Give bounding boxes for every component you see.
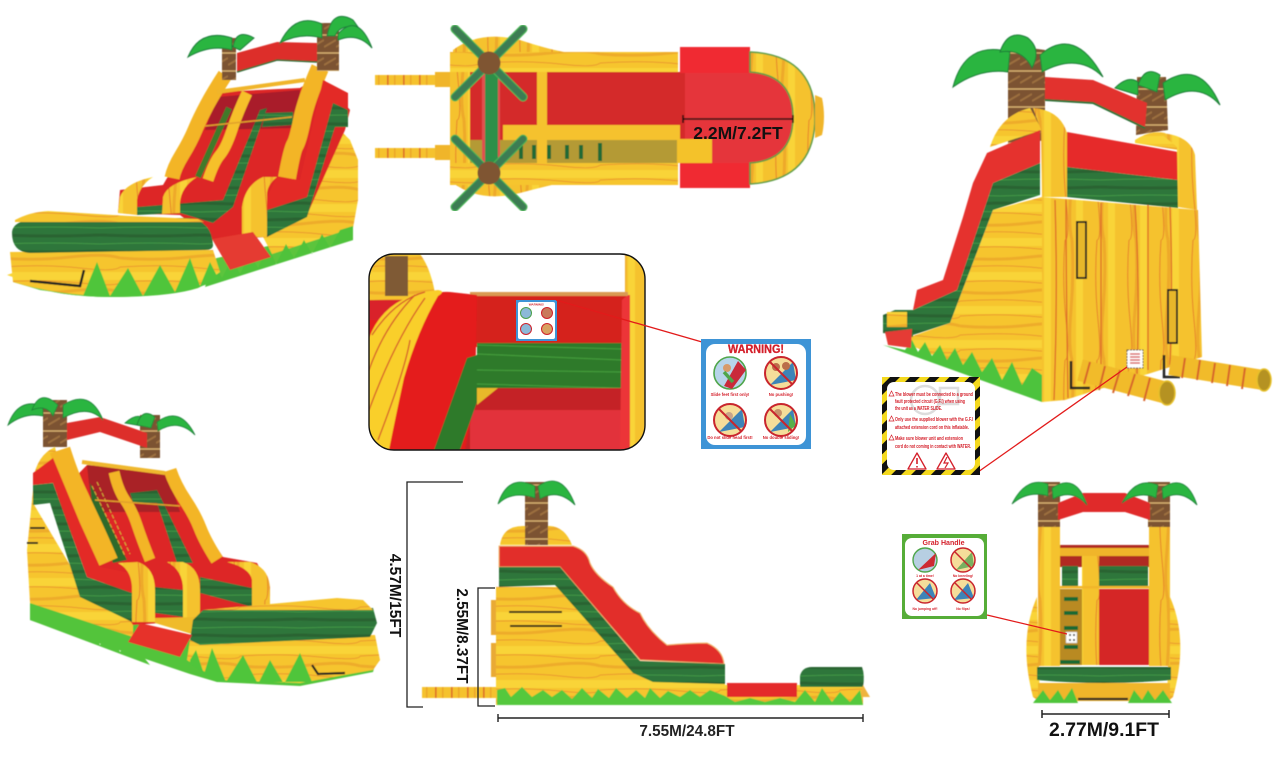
crossbar — [1060, 586, 1149, 588]
right green — [200, 577, 252, 607]
slide backing — [118, 75, 350, 240]
green slide — [499, 567, 725, 684]
sign inner — [706, 344, 806, 445]
handle slot left — [1077, 222, 1086, 278]
height bracket platform — [478, 588, 495, 706]
palm leaves — [1012, 482, 1197, 505]
slide view: front left perspective — [7, 16, 372, 297]
warning text: Only use the supplied blower with the G.F.I — [895, 417, 973, 423]
pool ring — [12, 218, 213, 253]
ladder rungs — [92, 482, 130, 556]
side slots — [27, 528, 45, 543]
callout line: power — [978, 367, 1127, 472]
arch underside — [237, 60, 317, 72]
warning text: attached extension cord on this inflatable. — [895, 425, 969, 431]
ladder lane — [90, 483, 127, 563]
mini grab handle dots — [1069, 635, 1075, 640]
palm trunk right — [317, 23, 339, 71]
warning text — [895, 392, 973, 450]
grab handle sign — [902, 534, 987, 619]
top left hump — [33, 447, 60, 480]
rule: no jumping off: No jumping off! — [912, 607, 938, 611]
right pipe mouth — [1257, 369, 1271, 391]
rear end wall — [450, 72, 470, 163]
rear hump — [990, 108, 1042, 147]
top band — [1060, 548, 1149, 556]
left bumper — [118, 562, 155, 622]
width arrow — [683, 115, 793, 123]
centre green bar — [482, 73, 500, 163]
pool ring — [190, 608, 377, 645]
left pipe — [1080, 370, 1167, 393]
slide green side — [913, 163, 1040, 335]
left pipe mouth — [1159, 381, 1175, 405]
top flap — [680, 47, 750, 73]
red bumper — [369, 292, 477, 450]
palm star upper — [455, 29, 523, 97]
left post — [1033, 108, 1067, 197]
ladder rungs — [1060, 599, 1080, 662]
pool top — [15, 211, 204, 222]
sign frame — [701, 339, 811, 449]
side skirt teeth — [205, 226, 353, 287]
hump — [500, 526, 572, 545]
callout line: grab handle — [987, 615, 1067, 634]
top edge — [470, 292, 628, 296]
ladder column — [1060, 589, 1082, 665]
bumper left — [118, 177, 153, 215]
small pool top — [887, 312, 907, 327]
height label platform: 2.55M/8.37FT — [453, 588, 470, 684]
palm leaves — [953, 35, 1220, 105]
power safety sign — [882, 377, 980, 475]
interior red — [470, 72, 685, 163]
left red backing — [370, 299, 402, 321]
side strips — [491, 600, 497, 677]
slide view: side elevation — [422, 481, 870, 705]
sign frame — [902, 534, 987, 619]
ladder lane — [470, 140, 712, 163]
divider wall — [503, 125, 680, 140]
warning text: cord do not coming in contact with WATER. — [895, 444, 971, 450]
length arrow — [498, 714, 863, 722]
center green bed stripe — [137, 108, 267, 223]
left wood curve — [369, 290, 442, 450]
rear pipes — [375, 75, 435, 85]
rule: no flips: No flips! — [956, 607, 970, 611]
side wood — [27, 490, 133, 637]
trunks — [1038, 482, 1170, 527]
mini warning sign — [516, 300, 557, 341]
warning sign — [701, 339, 811, 449]
green back left — [1062, 566, 1078, 587]
palm trunks — [43, 400, 160, 458]
red pad — [727, 683, 797, 697]
side teeth — [30, 605, 150, 665]
ground teeth — [497, 687, 863, 705]
slide view: rear perspective — [883, 35, 1271, 405]
center green — [155, 587, 183, 617]
green diagonal — [434, 355, 477, 450]
wall wave left — [172, 75, 225, 178]
arch — [237, 42, 317, 72]
width label front: 2.77M/9.1FT — [1049, 719, 1159, 741]
bumper center — [162, 177, 197, 214]
pool flap black slot — [30, 270, 84, 286]
bottom flap — [680, 163, 750, 188]
rule: no double: No double sliding! — [763, 435, 799, 440]
centre green core — [485, 73, 498, 163]
wall wave center — [208, 93, 247, 180]
bullet triangles — [889, 391, 894, 440]
sign inner — [905, 538, 984, 616]
faint blower drawing — [911, 386, 958, 414]
wood base right — [725, 685, 863, 705]
right wave — [170, 470, 217, 560]
mini power sign text — [1130, 354, 1140, 363]
bumper right — [242, 177, 277, 237]
hazard frame — [882, 377, 980, 475]
hazard icon: exclamation — [908, 453, 926, 469]
pool slot — [1078, 698, 1128, 700]
floor highlight — [470, 410, 625, 450]
pipe brackets — [1071, 355, 1180, 388]
green band streaks — [477, 345, 622, 388]
rule: no pushing: No pushing! — [769, 392, 793, 397]
top crossbar — [217, 80, 305, 92]
green back — [1067, 167, 1178, 208]
pool tail — [860, 685, 870, 697]
slide backing — [50, 465, 270, 625]
wall wave right — [287, 68, 320, 178]
rule: one at a time: 1 at a time! — [916, 574, 934, 578]
lower right hump — [1135, 132, 1178, 150]
outer green — [267, 103, 348, 237]
rear wall — [1042, 197, 1202, 402]
palm trunk left — [222, 38, 236, 80]
red flap — [128, 623, 192, 657]
red back — [1067, 132, 1178, 180]
rule: no head first: Do not slide head first! — [707, 435, 753, 440]
sign heading: WARNING! — [728, 344, 784, 356]
bottom wall — [450, 163, 678, 185]
red slide — [499, 546, 724, 664]
slide red side — [913, 130, 1040, 310]
rule: feet first: Slide feet first only! — [711, 392, 749, 397]
pool wall — [187, 635, 380, 683]
rear wood hump — [369, 254, 436, 300]
cross wall — [537, 72, 547, 163]
yellow runout panel — [677, 139, 712, 163]
palm leaves — [8, 398, 195, 435]
right wood — [625, 254, 645, 450]
warning text: fault protected circuit (G.F.I) when using — [895, 399, 965, 405]
detail outline — [369, 254, 645, 450]
mini power sign — [1127, 350, 1143, 368]
rule: no kneeling: No kneeling! — [953, 574, 973, 578]
slide view: front elevation — [1012, 482, 1197, 703]
red runout — [685, 72, 793, 163]
green band — [477, 343, 623, 393]
outer red — [33, 458, 132, 593]
small pool — [800, 667, 864, 687]
width arrow front — [1042, 710, 1169, 718]
mini warning sign: WARNING! — [529, 302, 544, 306]
back green band — [262, 112, 293, 127]
lower wood floor — [155, 617, 200, 635]
palm trunk right — [1136, 77, 1168, 135]
right red post — [620, 295, 630, 450]
green band — [130, 490, 193, 563]
height bracket overall — [407, 482, 463, 707]
pool flap — [7, 266, 83, 283]
green front — [1037, 667, 1171, 683]
palm trunk left — [1008, 45, 1045, 147]
warning text: the unit as a WATER SLIDE. — [895, 406, 942, 412]
net bar — [205, 117, 292, 126]
yellow floor wedge — [477, 388, 498, 405]
side wall — [910, 197, 1042, 402]
climbing slots — [509, 612, 562, 626]
top crossbar — [82, 462, 165, 473]
pool top — [203, 598, 373, 610]
end lug — [815, 95, 824, 138]
warning text: The blower must be connected to a ground — [895, 392, 973, 398]
floor dark — [464, 387, 622, 450]
outer green — [33, 483, 132, 622]
detail panel: warning sign location — [369, 254, 645, 450]
side wall wood — [262, 123, 358, 254]
width label: 2.2M/7.2FT — [693, 123, 783, 143]
green back right — [1099, 566, 1148, 587]
red slide — [1099, 589, 1149, 665]
mini grab handle sign — [1066, 632, 1077, 643]
net bar — [95, 500, 180, 506]
arch — [1058, 493, 1150, 520]
warning text: Make sure blower unit and extension — [895, 436, 963, 442]
right bumper — [227, 562, 270, 607]
sign inner — [887, 382, 975, 470]
middle wave — [114, 472, 150, 560]
pipe collars — [435, 72, 450, 160]
palm leaves — [188, 16, 372, 57]
pool flap — [315, 650, 380, 675]
right post — [1160, 133, 1197, 210]
detail background — [369, 254, 645, 450]
slide view: rear quarter low perspective — [8, 398, 380, 686]
center bumper — [167, 562, 200, 618]
handle slot right — [1168, 290, 1177, 343]
right pipe streaks — [1182, 358, 1245, 389]
pool end — [750, 52, 815, 184]
length label: 7.55M/24.8FT — [639, 723, 735, 740]
small red flap — [885, 329, 912, 348]
post — [385, 256, 408, 296]
right pipe — [1170, 365, 1263, 380]
arch underside — [1045, 100, 1145, 128]
posts — [1038, 527, 1170, 666]
wood streaks — [369, 292, 425, 440]
palm leaves — [498, 481, 575, 505]
center post — [1082, 556, 1099, 665]
back wall — [205, 90, 300, 130]
outer red — [267, 80, 348, 210]
height label overall: 4.57M/15FT — [386, 554, 403, 638]
slide view: top down plan — [375, 29, 824, 207]
lower rear pipe — [375, 148, 435, 158]
skirt teeth — [1033, 688, 1172, 703]
wood body — [496, 587, 725, 705]
left pipe streaks — [1084, 362, 1150, 401]
callout line: warning — [556, 300, 702, 342]
ground skirt — [13, 226, 353, 297]
side skirt — [883, 340, 1042, 402]
pool slot — [312, 665, 345, 674]
palm star lower — [455, 139, 523, 207]
arch — [67, 417, 147, 448]
small pool — [883, 310, 913, 337]
side hump left — [1026, 597, 1040, 702]
dark upper interior — [1060, 545, 1149, 567]
hazard icon: electric — [937, 453, 955, 469]
top wall — [450, 52, 678, 72]
back wall — [87, 465, 180, 512]
pool wall — [10, 250, 220, 296]
ladder rungs — [521, 143, 600, 161]
wood base — [1038, 683, 1170, 701]
pool peaks — [190, 648, 312, 684]
sign heading: Grab Handle — [922, 538, 964, 547]
rear wall red streaks — [1054, 200, 1172, 400]
red flap — [212, 232, 271, 270]
arch — [1045, 77, 1147, 128]
side hump right — [1167, 597, 1180, 702]
left wave — [60, 450, 108, 562]
red wall — [475, 294, 630, 348]
pool skirt peaks — [13, 258, 218, 297]
climbing ladder — [198, 108, 229, 177]
ground skirt — [30, 603, 378, 686]
rear pipe — [422, 687, 497, 698]
rear hump — [453, 37, 570, 196]
palm trunk — [525, 482, 548, 545]
